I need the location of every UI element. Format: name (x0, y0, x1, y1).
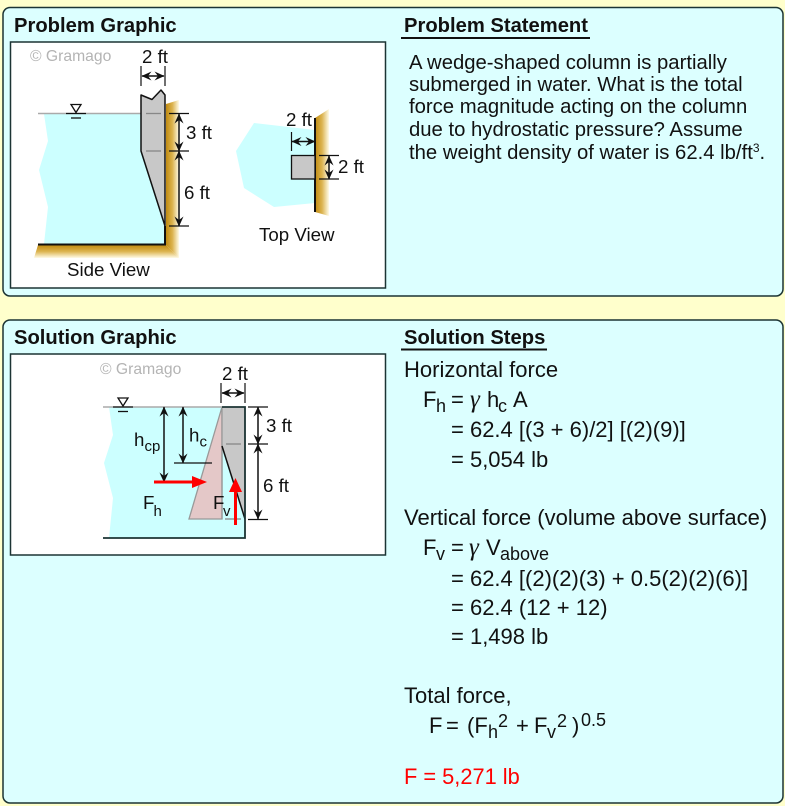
water level symbol (113, 398, 133, 412)
6 ft dimension (248, 444, 290, 520)
problem graphic box (10, 42, 386, 288)
solution steps: vertical force: F (423, 535, 436, 560)
solution steps: vertical force: Vertical force (volume above surface) (404, 505, 767, 530)
3 ft dimension (248, 407, 293, 444)
solution steps: vertical force: V (486, 535, 501, 560)
hc dimension (174, 407, 212, 463)
problem statement text: submerged in water. What is the total (409, 74, 743, 96)
solution graphic box (10, 354, 386, 555)
wall (315, 109, 329, 216)
heading: problem graphic: Problem Graphic (14, 15, 177, 37)
floor (34, 245, 179, 258)
heading: solution steps: Solution Steps (404, 327, 545, 349)
column (292, 156, 315, 179)
3 ft dimension: 3 ft (266, 415, 293, 436)
problem statement text: . (760, 142, 765, 164)
6 ft dimension: 6 ft (184, 182, 211, 203)
solution steps: total force: 2 (498, 711, 508, 731)
solution steps: total force: v (547, 722, 556, 742)
hc dimension: h (189, 424, 199, 446)
water surface line (38, 112, 142, 114)
hcp dimension: cp (144, 438, 160, 455)
3 ft dimension: 3 ft (186, 122, 213, 143)
final answer: F = 5,271 lb (404, 764, 520, 789)
2 ft dimension: 2 ft (222, 363, 249, 384)
side view label: Side View (67, 259, 150, 280)
hcp dimension: h (134, 429, 144, 450)
solution steps: horizontal force: F (423, 387, 436, 412)
solution steps: vertical force: = 62.4 [(2)(2)(3) + 0.5(2)(2)(6)] (451, 566, 748, 591)
solution steps: total force: h (488, 722, 498, 742)
solution steps: vertical force (404, 505, 767, 649)
arrow: Fh (143, 476, 207, 520)
solution steps: horizontal force: A (513, 387, 528, 412)
wall and floor line (38, 226, 165, 244)
hcp dimension (134, 407, 164, 482)
panel: problem (3, 8, 783, 296)
wall (166, 100, 179, 258)
solution steps: horizontal force: = 5,054 lb (451, 447, 548, 472)
arrow: Fv (213, 478, 242, 525)
solution steps: total force: ) (572, 713, 579, 738)
solution steps: total force (429, 710, 606, 742)
problem statement text: due to hydrostatic pressure? Assume (409, 119, 743, 141)
heading: problem statement: Problem Statement (404, 15, 588, 37)
solution steps: horizontal force: h (436, 396, 446, 416)
2 ft dimension: 2 ft (142, 46, 169, 67)
solution steps: horizontal force: h (487, 387, 499, 412)
water (39, 114, 165, 244)
problem statement text (409, 52, 765, 164)
top view label: Top View (259, 224, 335, 245)
pressure prism (189, 407, 222, 519)
2 ft width dimension: 2 ft (286, 109, 313, 130)
problem statement text: A wedge-shaped column is partially (409, 52, 728, 74)
solution steps: vertical force: v (436, 544, 445, 564)
problem statement text: force magnitude acting on the column (409, 96, 747, 118)
arrow: Fh: F (143, 492, 154, 513)
solution steps: total force: F (534, 713, 547, 738)
top view diagram (236, 109, 365, 245)
3 ft dimension (169, 114, 213, 151)
solution steps: vertical force: = 62.4 (12 + 12) (451, 595, 608, 620)
solution steps: total force: 2 (557, 711, 567, 731)
solution steps: horizontal force (404, 357, 686, 472)
solution steps: horizontal force: γ (470, 386, 481, 413)
2 ft depth dimension: 2 ft (338, 156, 365, 177)
column (141, 90, 165, 226)
water (104, 407, 245, 538)
arrow: Fh: h (154, 503, 162, 520)
solution steps: total force: = (446, 713, 459, 738)
water (236, 123, 315, 207)
problem statement text: the weight density of water is 62.4 lb/ft (409, 142, 753, 164)
problem statement text: 3 (753, 141, 760, 155)
solution steps: horizontal force: = (451, 387, 464, 412)
solution steps: vertical force: above (500, 544, 549, 564)
6 ft dimension (169, 151, 211, 226)
2 ft dimension (221, 363, 249, 403)
watermark: © Gramago (30, 48, 112, 65)
arrow: Fv: F (213, 492, 224, 513)
2 ft dimension (141, 46, 169, 86)
heading: solution graphic: Solution Graphic (14, 327, 177, 349)
solution steps: horizontal force: Horizontal force (404, 357, 558, 382)
solution steps: vertical force: = 1,498 lb (451, 624, 548, 649)
watermark: © Gramago (100, 361, 182, 378)
panel: solution (3, 320, 783, 803)
solution steps: horizontal force: = 62.4 [(3 + 6)/2] [(2)(9)] (451, 417, 686, 442)
solution steps: vertical force: γ (469, 534, 480, 561)
arrow: Fv: v (223, 503, 231, 520)
surface and walls (103, 407, 245, 538)
solution steps: total force: + (516, 713, 529, 738)
solution steps: vertical force: = (451, 535, 464, 560)
side view diagram (34, 46, 213, 280)
solution steps: total force: 0.5 (581, 710, 606, 730)
solution steps: total force: (F (467, 713, 488, 738)
water level symbol (66, 104, 86, 118)
6 ft dimension: 6 ft (263, 475, 290, 496)
solution steps: total force: F (429, 713, 442, 738)
solution steps: horizontal force: c (498, 396, 507, 416)
column (222, 407, 245, 519)
total force label: Total force, (404, 683, 512, 708)
hc dimension: c (200, 434, 208, 450)
